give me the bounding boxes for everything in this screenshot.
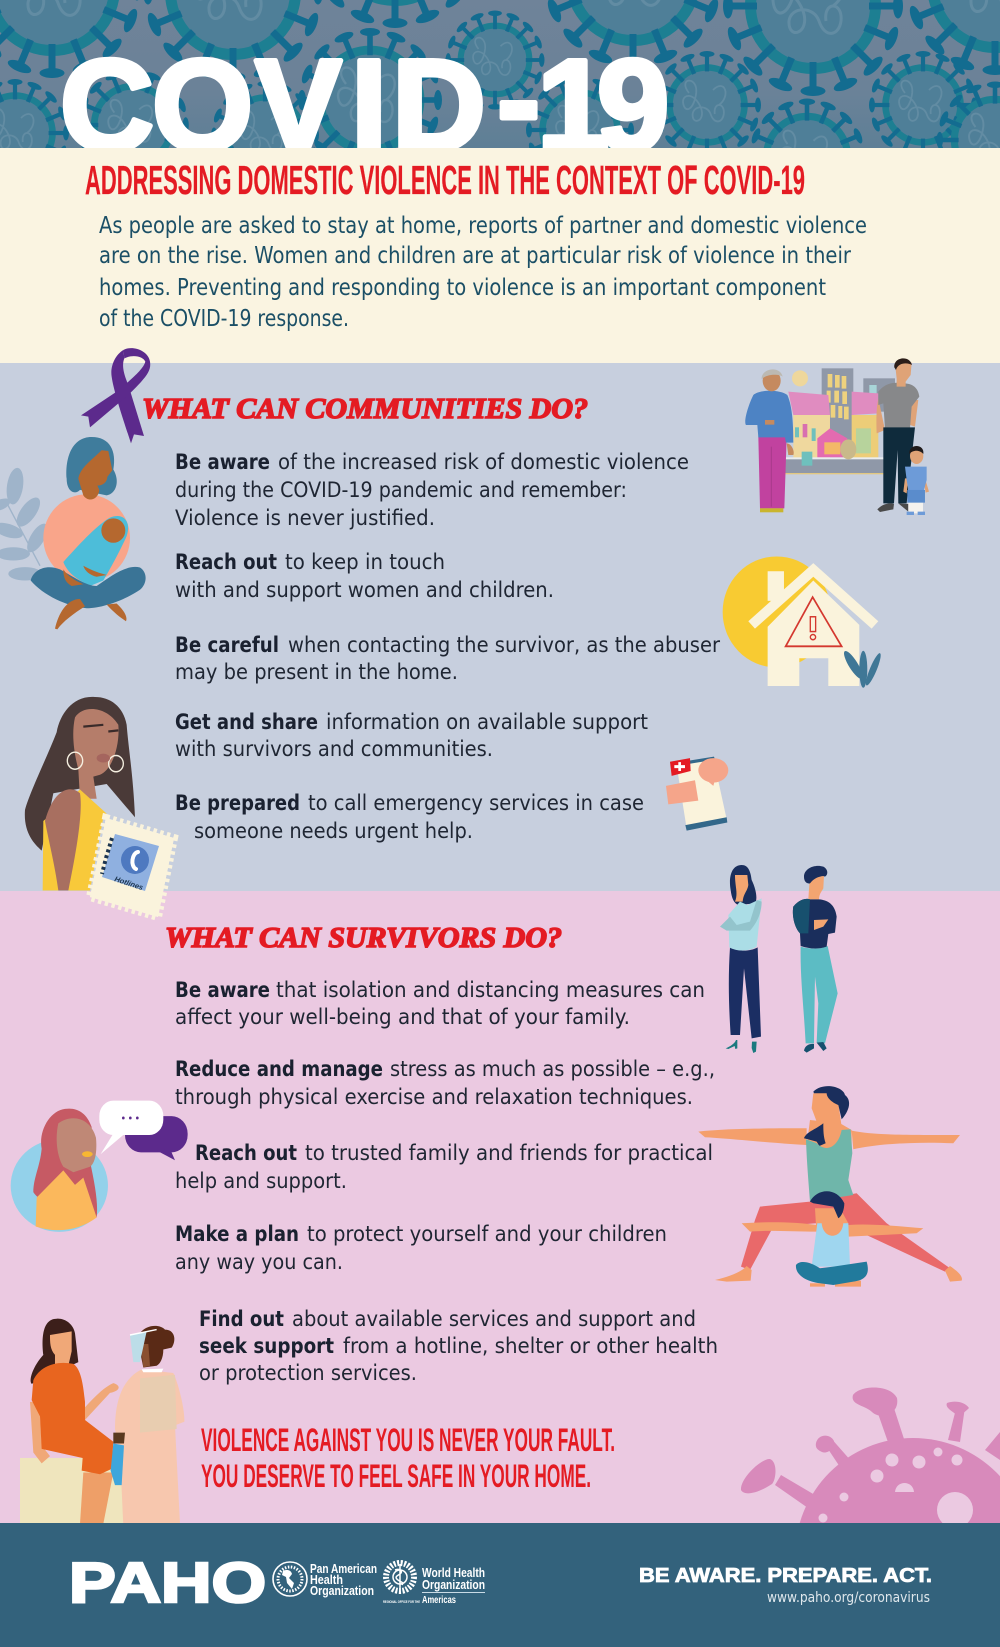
text block: survivors actions: Make a plan [175, 1222, 299, 1246]
icon: purple speech bubble [125, 1116, 188, 1160]
logo: PAHO name: Pan American [310, 1561, 377, 1576]
text block: communities actions: to keep in touch [285, 550, 445, 574]
text block: communities actions: Be careful [175, 633, 279, 657]
figure: boy [903, 446, 929, 515]
text block: communities actions: with survivors and communities. [175, 737, 493, 761]
text block: survivors actions: about available services and support and [292, 1307, 696, 1331]
illustration: survivor with health worker [20, 1319, 184, 1524]
text block: communities actions: Reach out [175, 550, 277, 574]
logo: PAHO name: Health [310, 1572, 343, 1587]
intro text: of the COVID-19 response. [99, 306, 349, 332]
figure: child [742, 1191, 923, 1287]
logo: PAHO emblem [273, 1562, 307, 1596]
intro text: are on the rise. Women and children are at particular risk of violence in their [99, 243, 851, 269]
icon: purple ribbon [81, 348, 150, 443]
illustration: woman with hotline notebook: Hotlines [113, 874, 144, 892]
text block: survivors actions: Be aware [175, 978, 270, 1002]
text block: survivors actions: seek support [199, 1334, 334, 1358]
logo: WHO name [383, 1565, 485, 1606]
logo: PAHO name [310, 1561, 377, 1598]
text block: communities actions: Violence is never justified. [175, 506, 435, 530]
panel: footer [0, 1523, 1000, 1647]
text block: communities actions: during the COVID-19 pandemic and remember: [175, 478, 627, 502]
logo: WHO name: Organization [422, 1577, 485, 1592]
text block: survivors actions: any way you can. [175, 1250, 343, 1274]
logo: WHO name: REGIONAL OFFICE FOR THE [383, 1599, 420, 1604]
text block: communities actions: with and support women and children. [175, 578, 554, 602]
text block: survivors actions: Find out [199, 1307, 284, 1331]
icon: pink virus corner [741, 1388, 1000, 1523]
logo: WHO emblem [386, 1563, 414, 1591]
logo: WHO name: World Health [422, 1565, 485, 1580]
figure: man [876, 358, 919, 512]
text block: communities actions: Get and share [175, 710, 318, 734]
intro text: homes. Preventing and responding to violence is an important component [99, 275, 826, 301]
text block: survivors actions: affect your well-being and that of your family. [175, 1005, 630, 1029]
text block: survivors actions: or protection services. [199, 1361, 417, 1385]
logo: WHO name: Americas [422, 1595, 456, 1606]
text block: communities actions: Be aware [175, 450, 270, 474]
heading: communities: WHAT CAN COMMUNITIES DO? [142, 394, 588, 425]
text block: communities actions: of the increased risk of domestic violence [278, 450, 689, 474]
website: www.paho.org/coronavirus [767, 1590, 930, 1606]
figure: woman [720, 865, 762, 1053]
panel: communities background [0, 363, 1000, 891]
intro text: As people are asked to stay at home, reports of partner and domestic violence [99, 213, 867, 239]
panel: survivors background [0, 891, 1000, 1523]
icon: clipboard with speech bubbles [666, 757, 728, 831]
illustration: woman with hotline notebook [25, 697, 174, 917]
figure: man [793, 866, 838, 1053]
text block: survivors actions [175, 978, 718, 1385]
closing message: VIOLENCE AGAINST YOU IS NEVER YOUR FAULT. [201, 1422, 615, 1458]
heading: survivors: WHAT CAN SURVIVORS DO? [165, 923, 562, 954]
text block: communities actions [175, 450, 720, 843]
logo: PAHO name: Organization [310, 1583, 374, 1598]
icon: house with warning sign [723, 556, 883, 688]
text block: survivors actions: from a hotline, shelter or other health [343, 1334, 718, 1358]
text block: survivors actions: help and support. [175, 1169, 347, 1193]
text block: survivors actions: through physical exercise and relaxation techniques. [175, 1085, 693, 1109]
illustration: woman talking with speech bubbles [11, 1101, 188, 1232]
text block: survivors actions: to trusted family and friends for practical [305, 1141, 713, 1165]
illustration: mother holding baby [0, 437, 146, 629]
logo: PAHO wordmark: PAHO [69, 1551, 266, 1615]
text block: survivors actions: stress as much as possible – e.g., [390, 1057, 715, 1081]
text block: survivors actions: that isolation and distancing measures can [276, 978, 705, 1002]
text block: survivors actions: Reach out [195, 1141, 297, 1165]
closing message [201, 1422, 615, 1494]
figure: older woman [745, 369, 794, 512]
title: COVID-19 [60, 26, 669, 178]
text block: communities actions: information on available support [326, 710, 648, 734]
panel: virus banner [0, 0, 1000, 148]
text block: communities actions: may be present in the home. [175, 660, 458, 684]
text block: communities actions: to call emergency services in case [308, 791, 644, 815]
intro text [99, 213, 867, 332]
illustration: family and city [745, 358, 929, 515]
illustration: standing couple [720, 865, 838, 1053]
text block: survivors actions: to protect yourself and your children [307, 1222, 667, 1246]
slogan: BE AWARE. PREPARE. ACT. [639, 1565, 932, 1587]
text block: survivors actions: Reduce and manage [175, 1057, 383, 1081]
text block: communities actions: when contacting the survivor, as the abuser [288, 633, 720, 657]
icon: white speech bubble [99, 1101, 163, 1154]
text block: communities actions: someone needs urgent help. [194, 819, 473, 843]
closing message: YOU DESERVE TO FEEL SAFE IN YOUR HOME. [201, 1458, 591, 1494]
panel: introduction background [0, 148, 1000, 363]
text block: communities actions: Be prepared [175, 791, 300, 815]
illustration: yoga mother and child [698, 1086, 962, 1287]
